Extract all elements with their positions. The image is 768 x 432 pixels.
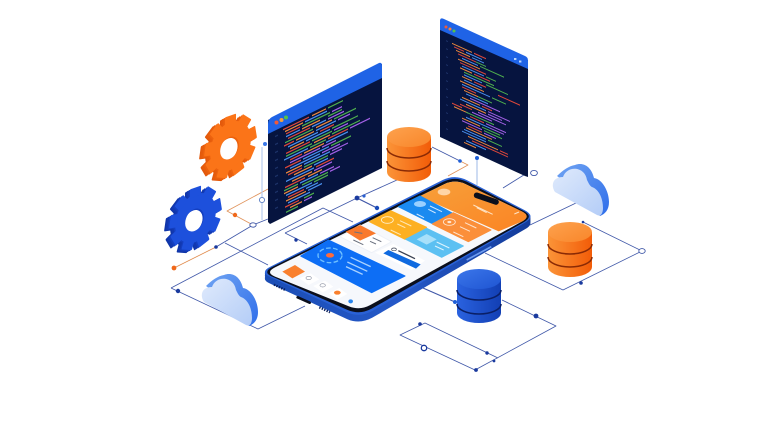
icon: right cloud: [553, 164, 609, 216]
card: light blue: [406, 228, 463, 257]
left window code lines: [275, 88, 370, 218]
right window control dots: [444, 26, 456, 32]
bottom nav items: [282, 265, 353, 303]
panel: left code window: [268, 63, 382, 224]
right window code lines: [446, 41, 520, 168]
card: blue top: [398, 196, 453, 223]
database: top orange: [387, 127, 431, 182]
connector wires: [171, 147, 642, 370]
speaker grilles and charging port: [274, 285, 330, 312]
icon: blue gear: [164, 186, 222, 254]
smartphone: [265, 177, 530, 321]
icon: left cloud: [202, 274, 258, 326]
screen header: [419, 182, 527, 231]
header logo and labels: [438, 189, 519, 214]
left window control dots: [274, 116, 288, 124]
card: white with orange icon: [340, 225, 392, 253]
card: yellow: [369, 211, 427, 239]
database: right orange: [548, 222, 592, 277]
phone bezel: [267, 179, 529, 312]
camera notch: [477, 195, 496, 202]
right window title bar: [440, 18, 528, 69]
connector nodes: [172, 142, 645, 372]
panel: right code window: [440, 18, 528, 177]
phone rim: [265, 177, 530, 315]
right window buttons: [514, 58, 521, 62]
database: blue: [457, 269, 501, 323]
phone side edge: [265, 179, 530, 321]
card: white with blue button: [375, 244, 425, 270]
phone screen: [270, 182, 527, 308]
left window title bar: [268, 63, 382, 134]
card: orange: [432, 213, 491, 242]
card: large blue banner: [301, 240, 405, 293]
side button: [467, 247, 491, 260]
icon: orange gear: [199, 114, 257, 182]
